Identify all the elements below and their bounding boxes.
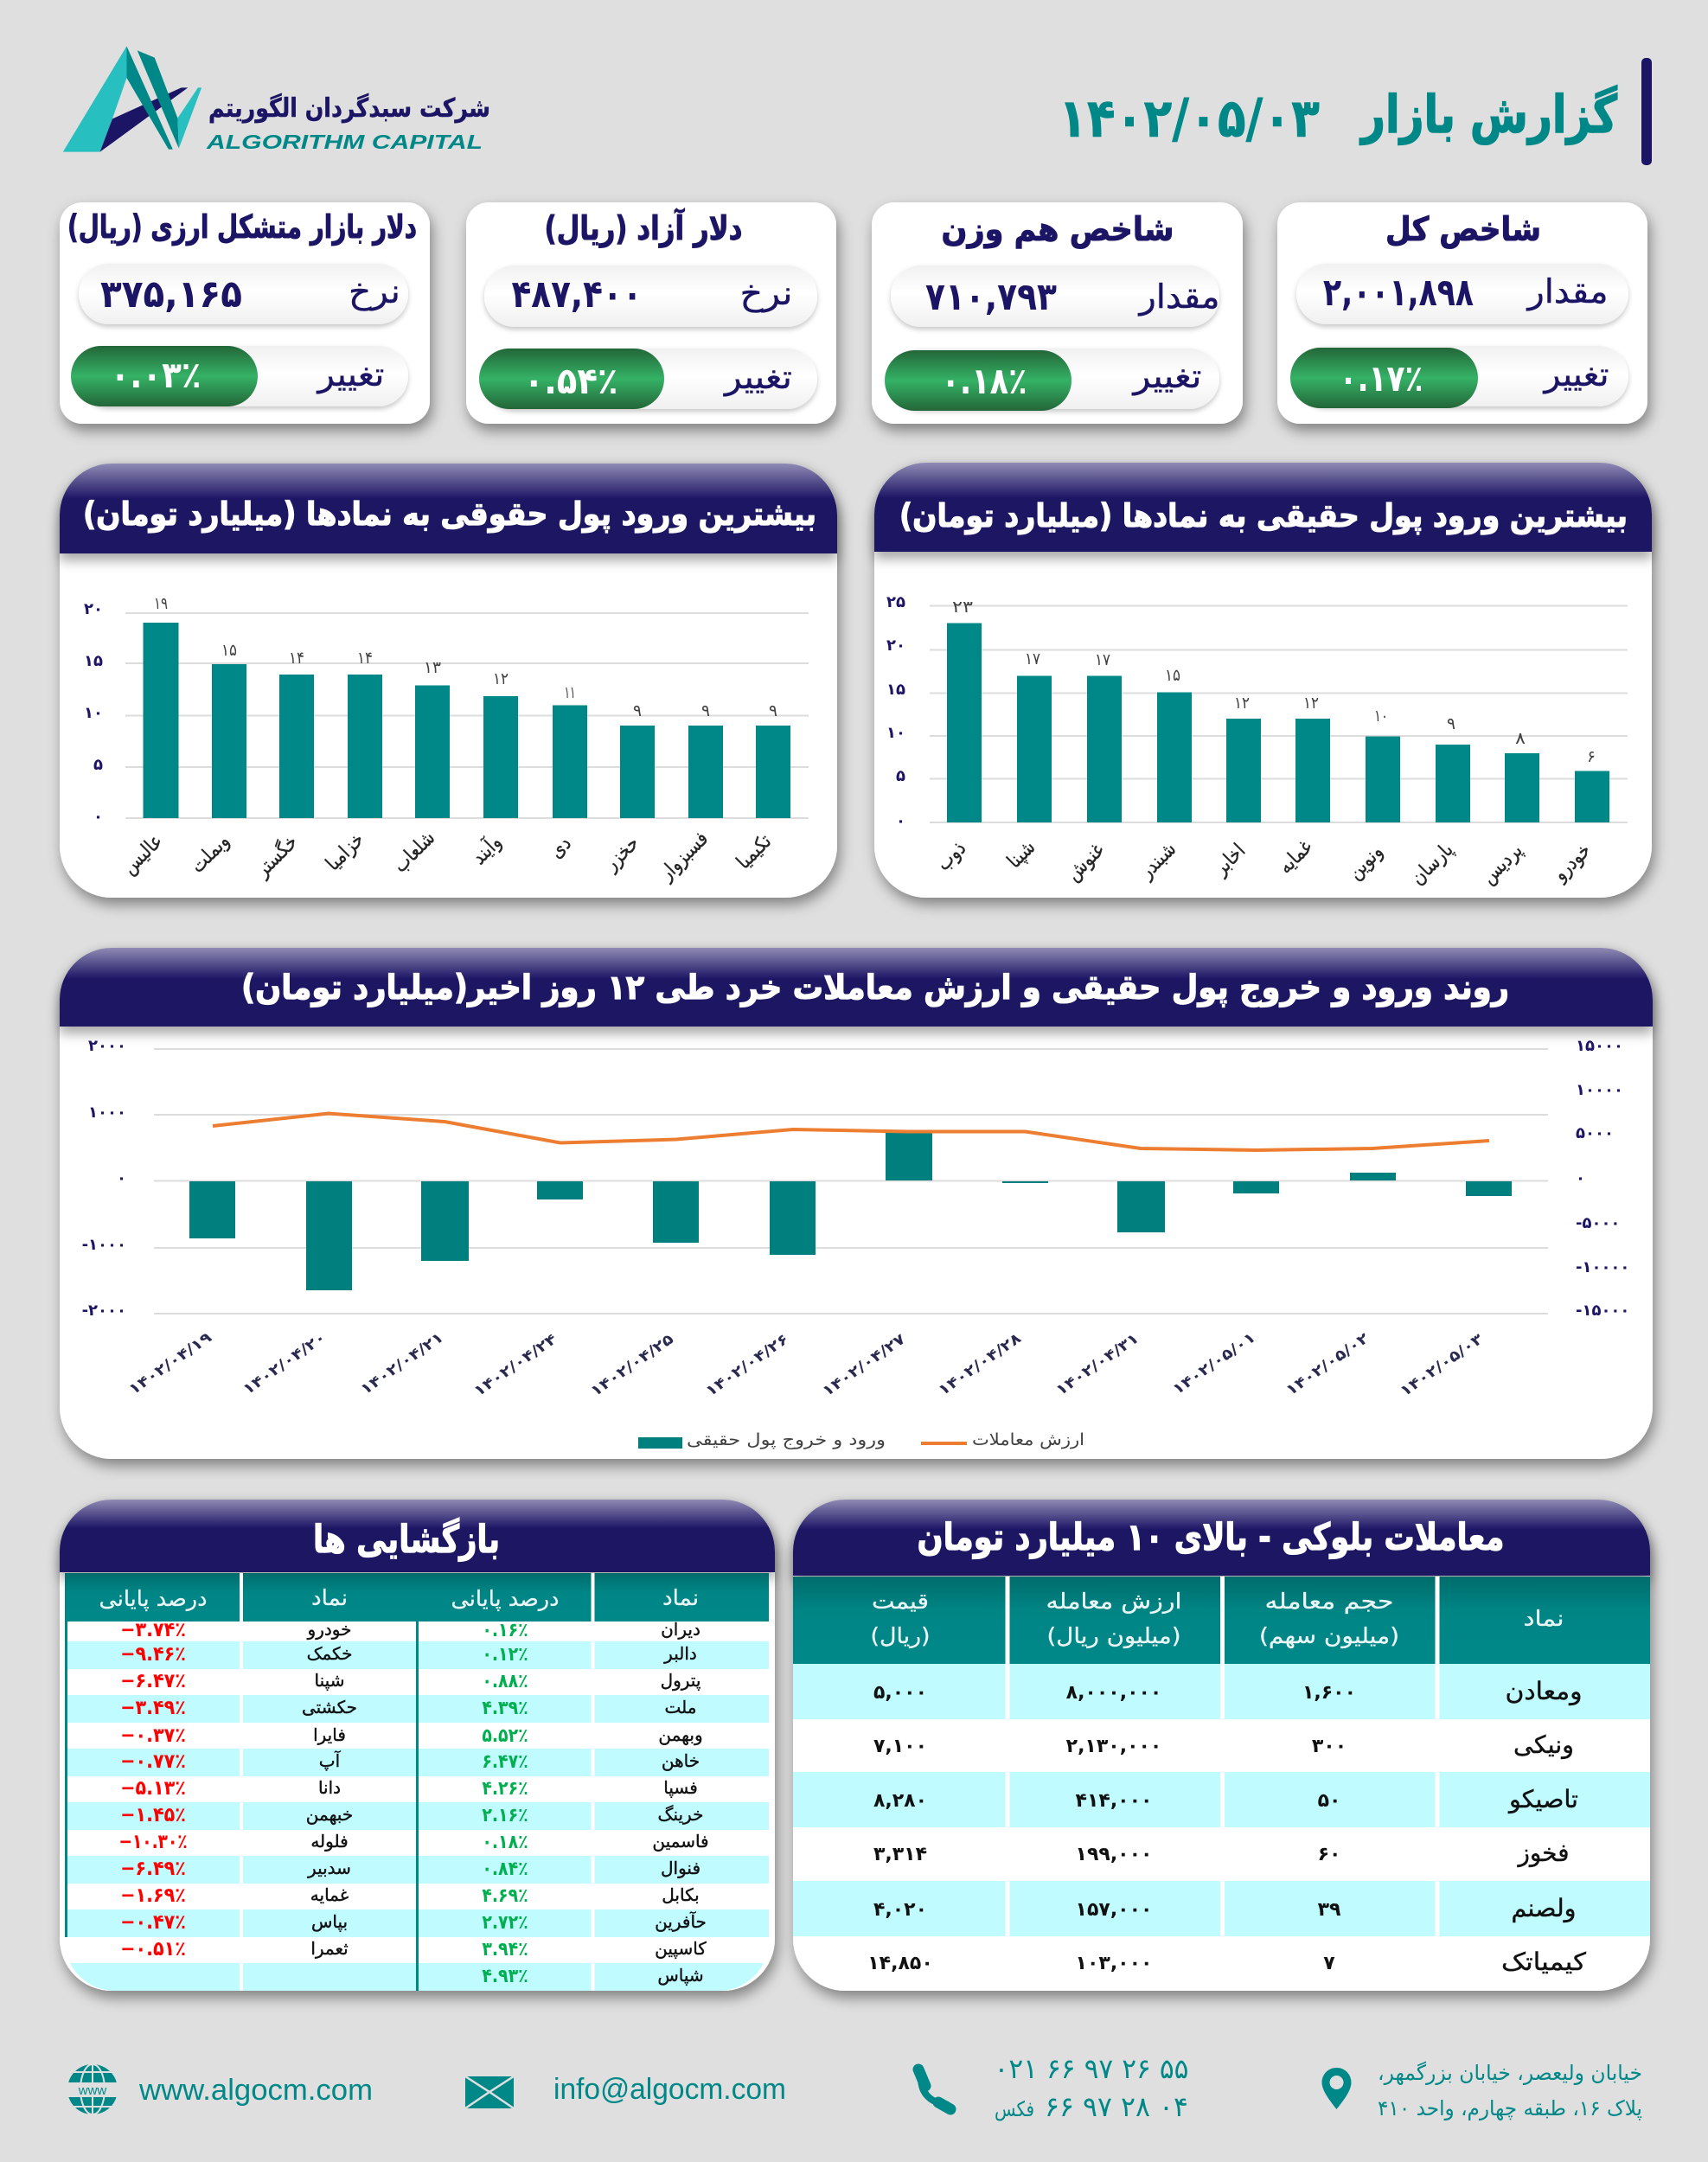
panel heading [60,1500,775,1572]
date labels [126,1328,1487,1400]
bar chart: real money inflow: ۲۰ [886,636,905,655]
right axis: ۱۵۰۰۰ [1576,1037,1623,1055]
table header [100,1588,697,1612]
bar chart: institutional money inflow: ۱۳ [424,658,441,677]
negative column percentages: −۹.۴۶٪ [120,1643,186,1666]
row: ونیکی: ۲,۱۳۰,۰۰۰ [1066,1736,1161,1757]
legend [638,1430,1084,1449]
row: ونیکی: ۷,۱۰۰ [873,1736,927,1757]
bar chart: real money inflow: ونوین [1344,841,1388,885]
value pill: نرخ [740,274,792,313]
icon: phone [918,2069,950,2109]
panel heading: بیشترین ورود پول حقوقی به نمادها (میلیارد تومان) [83,496,816,533]
bar chart: institutional money inflow: شلعاب [389,827,440,878]
bar chart: real money inflow: ۱۲ [1234,694,1250,713]
table header [870,1589,1564,1649]
bar chart: real money inflow: ۲۳ [952,598,973,617]
change pill [1290,346,1628,408]
bar chart: institutional money inflow: تکیمیا [732,829,777,874]
value pill: مقدار [1526,272,1609,310]
positive column percentages: ۲.۷۲٪ [482,1911,528,1933]
logo: Algorithm Capital [63,46,490,153]
address [1378,2061,1642,2120]
bar chart: institutional money inflow: حخزر [599,832,643,876]
negative column symbols: سدبیر [307,1858,351,1878]
positive column percentages: ۰.۱۶٪ [482,1619,528,1641]
bar chart: institutional money inflow: ۱۱ [564,683,576,702]
positive column percentages: ۶.۴۷٪ [482,1750,528,1772]
bar chart: real money inflow: ۶ [1587,747,1596,766]
negative column symbols [302,1619,357,1959]
negative column symbols: ثعمرا [310,1938,349,1959]
table: block trades [793,1577,1650,1991]
panel: top institutional money inflow [60,464,837,898]
positive column percentages: ۰.۱۸٪ [482,1831,528,1852]
bar chart: real money inflow: پردیس [1477,839,1527,889]
icon: envelope [465,2076,514,2108]
row: ولصنم: ۱۵۷,۰۰۰ [1076,1899,1152,1921]
negative column symbols: فلوله [310,1831,349,1852]
legend: ارزش معاملات [972,1430,1084,1449]
bar chart: real money inflow: پارسان [1406,838,1458,890]
negative column symbols: خکمک [307,1643,352,1664]
positive column symbols: بکابل [662,1884,700,1905]
value pill: مقدار [1137,278,1219,316]
positive column percentages: ۴.۹۳٪ [482,1965,528,1986]
table header: نماد [662,1585,699,1610]
row: ولصنم [873,1897,1574,1923]
negative column percentages: −۵.۱۳٪ [120,1777,186,1800]
bar chart: real money inflow: ۲۵ [886,593,905,611]
title: market report and date [1059,58,1652,165]
positive column percentages [482,1619,528,1986]
table header: (ریال) [870,1623,931,1648]
positive column percentages: ۵.۵۲٪ [482,1724,528,1746]
value pill [891,265,1219,327]
change pill: تغییر [1542,355,1609,394]
positive column symbols: وبهمن [658,1724,703,1745]
negative column percentages: −۳.۴۹٪ [120,1697,186,1719]
panel heading [60,948,1653,1027]
left axis: -۱۰۰۰ [82,1236,126,1254]
right axis: -۱۰۰۰۰ [1576,1258,1629,1276]
panel heading: بازگشایی ها [313,1517,500,1562]
positive column percentages: ۴.۳۹٪ [482,1697,528,1718]
change pill [479,349,817,409]
bar chart: real money inflow: خودرو [1548,839,1596,886]
table header: درصد پایانی [99,1586,208,1611]
positive column symbols: دیران [661,1619,700,1640]
bar chart: real money inflow: ۱۵ [1165,666,1180,685]
row: ونیکی [873,1734,1572,1759]
row: ولصنم: ۳۹ [1318,1899,1340,1921]
row: کیمیاتک: کیمیاتک [1501,1948,1587,1976]
date labels: ۱۴۰۲/۰۵/۰۳ [1398,1330,1487,1400]
row: ولصنم: ولصنم [1512,1894,1576,1922]
right axis: -۱۵۰۰۰ [1576,1302,1629,1320]
logo english name: ALGORITHM CAPITAL [206,131,483,153]
bar chart: real money inflow: ۵ [896,767,905,785]
negative column percentages [118,1619,188,1961]
date labels: ۱۴۰۲/۰۴/۲۶ [703,1331,792,1400]
positive column symbols: فاسمین [652,1831,709,1852]
change pill [71,346,408,406]
date labels: ۱۴۰۲/۰۵/۰۱ [1170,1329,1259,1398]
bar chart: institutional money inflow: ۹ [701,701,710,720]
title accent bar [1641,58,1652,165]
change pill: تغییر [1131,357,1202,396]
date labels: ۱۴۰۲/۰۴/۳۱ [1053,1330,1142,1399]
positive column percentages: ۳.۹۴٪ [482,1938,528,1960]
bar chart: real money inflow: غمایه [1274,835,1317,879]
positive column symbols: ملت [665,1697,696,1717]
website: www.algocm.com [138,2074,373,2107]
positive column percentages: ۰.۸۴٪ [482,1858,528,1879]
table header: قیمت [872,1589,929,1614]
legend: ورود و خروج پول حقیقی [687,1430,886,1449]
right axis: ۱۰۰۰۰ [1576,1081,1623,1099]
negative column percentages: −۶.۴۷٪ [120,1670,186,1692]
bar chart: real money inflow: ۱۰ [1374,707,1388,726]
bar chart: real money inflow: ذوب [932,837,970,875]
negative column percentages: −۰.۵۱٪ [120,1938,186,1961]
row: ونیکی: ۳۰۰ [1312,1736,1347,1757]
address: خیابان ولیعصر، خیابان بزرگمهر، [1378,2061,1642,2085]
card: equal weight index [872,202,1243,424]
title text: گزارش بازار [1359,85,1617,145]
negative column symbols: فایرا [313,1724,346,1745]
negative column symbols: حکشتی [302,1697,357,1717]
date labels: ۱۴۰۲/۰۴/۱۹ [126,1328,215,1398]
bar chart: institutional money inflow: ۱۹ [154,594,168,613]
row: کیمیاتک [870,1951,1586,1973]
bar chart: institutional money inflow: فسبزوار [655,828,713,886]
positive column symbols: فسپا [663,1777,698,1799]
change pill: ۰.۵۴٪ [524,360,617,402]
panel heading: بیشترین ورود پول حقیقی به نمادها (میلیارد تومان) [899,497,1628,534]
negative column percentages: −۱.۶۹٪ [120,1884,186,1907]
table header: درصد پایانی [451,1586,559,1611]
left axis [82,1037,126,1320]
panel: top real money inflow [874,463,1652,898]
bar chart: institutional money inflow: ۵ [93,756,103,774]
bar chart: real money inflow: ۰ [896,812,905,830]
change pill: تغییر [316,355,384,394]
logo mark [63,46,202,152]
table header: حجم معامله [1264,1589,1394,1615]
date labels: ۱۴۰۲/۰۴/۲۴ [471,1331,560,1400]
bar chart: real money inflow: اخابر [1209,839,1251,880]
card title: شاخص هم وزن [941,210,1174,249]
panel: block trades table [793,1500,1650,1991]
row: تاصیکو: ۴۱۴,۰۰۰ [1076,1790,1152,1812]
bar chart: institutional money inflow: ۹ [769,701,777,720]
value pill [79,264,408,324]
value pill: ۳۷۵,۱۶۵ [100,272,242,317]
bar chart: institutional money inflow [84,594,809,886]
footer: contact details [66,2052,1642,2123]
negative column symbols: شپنا [315,1670,344,1692]
panel heading: معاملات بلوکی - بالای ۱۰ میلیارد تومان [917,1516,1505,1559]
bar chart: real money inflow: ۱۵ [886,681,905,699]
row: فخوز: ۱۹۹,۰۰۰ [1076,1844,1152,1865]
positive column symbols: پترول [661,1670,700,1692]
card title: دلار آزاد (ریال) [545,208,742,247]
bar chart: real money inflow: ۱۰ [886,724,905,742]
bar chart: institutional money inflow: ۰ [93,808,103,826]
bar chart: institutional money inflow: وآیند [466,829,506,869]
bar chart: institutional money inflow: ۲۰ [84,600,103,618]
bar chart: real money inflow: ۱۷ [1095,650,1110,669]
bar chart: real money inflow: ۱۲ [1303,694,1319,713]
bar chart: institutional money inflow: عالیس [118,829,168,880]
bar chart: institutional money inflow: ۱۵ [221,641,237,660]
date labels: ۱۴۰۲/۰۴/۲۵ [588,1331,677,1400]
negative column percentages: −۰.۳۷٪ [120,1724,186,1747]
card: free dollar [466,202,836,424]
date labels: ۱۴۰۲/۰۴/۲۷ [820,1330,909,1400]
table header: (میلیون سهم) [1259,1623,1399,1649]
change pill [885,349,1219,411]
row: ومعادن: ۸,۰۰۰,۰۰۰ [1066,1682,1161,1704]
panel heading [793,1500,1650,1576]
row: ومعادن [873,1680,1581,1705]
change pill: ۰.۱۷٪ [1339,357,1423,400]
change pill: ۰.۰۳٪ [111,354,201,396]
positive column symbols: فنوال [661,1858,700,1878]
panel: opening symbols table [60,1500,775,1991]
positive column symbols: کاسپین [655,1938,707,1960]
row: ومعادن: ومعادن [1505,1677,1583,1705]
card title: دلار بازار متشکل ارزی (ریال) [67,208,417,246]
row: فخوز: فخوز [1517,1839,1569,1867]
value pill: ۴۸۷,۴۰۰ [512,272,642,317]
bar chart: institutional money inflow: وبملت [186,829,234,878]
row: فخوز: ۳,۳۱۴ [873,1844,927,1865]
negative column symbols: دانا [318,1777,341,1798]
fax number: ۶۶ ۹۷ ۲۸ ۰۴ [1045,2090,1188,2123]
bar chart: institutional money inflow: دی [545,832,576,863]
positive column symbols [652,1619,709,1986]
positive column symbols: حآفرین [655,1910,707,1932]
bar chart: real money inflow: ۸ [1515,729,1526,748]
negative column symbols: غمایه [310,1884,349,1905]
row: تاصیکو: تاصیکو [1507,1785,1578,1813]
positive column symbols: خاهن [662,1750,700,1771]
row: ومعادن: ۱,۶۰۰ [1302,1682,1356,1704]
negative column symbols: بپاس [311,1911,348,1933]
combo chart: bars and line [82,1037,1629,1449]
positive column symbols: شپاس [657,1965,704,1986]
negative column percentages: −۱۰.۳۰٪ [118,1831,188,1853]
value pill [484,265,817,327]
bar chart: real money inflow: ۹ [1447,714,1455,733]
negative column percentages: −۰.۴۷٪ [120,1911,186,1934]
left axis: -۲۰۰۰ [82,1302,126,1320]
left axis: ۰ [117,1169,126,1187]
bar chart: real money inflow: ۱۷ [1025,649,1040,668]
row: کیمیاتک: ۱۰۳,۰۰۰ [1076,1953,1152,1974]
panel heading: روند ورود و خروج پول حقیقی و ارزش معاملات خرد طی ۱۲ روز اخیر(میلیارد تومان) [241,969,1509,1007]
card title: شاخص کل [1385,210,1541,248]
bar chart: institutional money inflow: ۱۵ [84,652,103,670]
table: opening percentages [65,1573,769,1991]
table header: نماد [311,1585,348,1610]
email: info@algocm.com [553,2073,786,2106]
negative column percentages: −۶.۴۹٪ [120,1858,186,1880]
negative column percentages: −۱.۴۵٪ [120,1804,186,1826]
right axis: ۵۰۰۰ [1576,1124,1614,1142]
report date: ۱۴۰۲/۰۵/۰۳ [1059,86,1320,150]
row: کیمیاتک: ۷ [1323,1953,1335,1974]
icon: globe: www [78,2083,106,2098]
left axis: ۲۰۰۰ [88,1037,126,1055]
change pill: تغییر [723,358,792,397]
row: تاصیکو [873,1788,1577,1814]
bar chart: real money inflow [886,593,1628,890]
date labels: ۱۴۰۲/۰۵/۰۲ [1283,1329,1372,1399]
date labels: ۱۴۰۲/۰۴/۲۰ [240,1329,329,1398]
bar chart: real money inflow: شپنا [1002,835,1040,873]
table header: نماد [1524,1606,1564,1631]
value pill: ۲,۰۰۱,۸۹۸ [1323,271,1474,315]
positive column percentages: ۴.۲۶٪ [482,1777,528,1799]
icon: location pin [1321,2068,1351,2109]
card: organized market dollar [60,202,430,424]
phone number: ۰۲۱ ۶۶ ۹۷ ۲۶ ۵۵ [995,2052,1188,2085]
bar chart: institutional money inflow: خزامیا [322,828,368,875]
negative column symbols: خبهمن [306,1804,353,1825]
right axis: ۰ [1576,1169,1585,1187]
negative column percentages: −۳.۷۴٪ [120,1619,186,1641]
bar chart: institutional money inflow: ۱۲ [493,669,509,688]
right axis: -۵۰۰۰ [1576,1214,1620,1232]
left axis: ۱۰۰۰ [88,1103,126,1122]
panel: 12 day trend of real money flow and trade value [60,948,1653,1459]
row: فخوز [873,1845,1568,1868]
address: پلاک ۱۶، طبقه چهارم، واحد ۴۱۰ [1378,2096,1642,2120]
bar chart: institutional money inflow: ۱۴ [289,649,304,668]
bar chart: real money inflow: غنوش [1062,839,1109,886]
table header: (میلیون ریال) [1046,1623,1181,1648]
positive column percentages: ۰.۱۲٪ [482,1643,528,1665]
positive column symbols: خرینگ [658,1804,703,1825]
bar chart: institutional money inflow: ۱۰ [84,704,103,722]
value pill: نرخ [349,272,400,311]
change pill: ۰.۱۸٪ [941,360,1027,402]
value pill [1296,264,1628,324]
bar chart: institutional money inflow: ۹ [633,701,642,720]
positive column percentages: ۴.۶۹٪ [482,1884,528,1906]
row: ومعادن: ۵,۰۰۰ [873,1682,927,1704]
right axis [1576,1037,1629,1320]
panel heading [60,464,837,553]
positive column percentages: ۲.۱۶٪ [482,1804,528,1826]
row: ولصنم: ۴,۰۲۰ [873,1899,927,1921]
positive column percentages: ۰.۸۸٪ [482,1670,528,1692]
row: کیمیاتک: ۱۴,۸۵۰ [867,1953,933,1974]
date labels: ۱۴۰۲/۰۴/۲۱ [358,1329,447,1398]
row: تاصیکو: ۵۰ [1318,1790,1340,1812]
bar chart: institutional money inflow: خگستر [250,830,303,882]
bar chart: real money inflow: شبندر [1135,838,1180,884]
negative column symbols: خودرو [307,1619,351,1640]
bar chart: institutional money inflow: ۱۴ [357,649,373,668]
negative column symbols: آپ [319,1749,342,1771]
panel heading [874,463,1652,552]
icon: globe [66,2064,119,2114]
value pill: ۷۱۰,۷۹۳ [925,275,1057,319]
date labels: ۱۴۰۲/۰۴/۲۸ [936,1329,1025,1399]
positive column symbols: دالبر [663,1643,697,1664]
table header: ارزش معامله [1046,1589,1181,1614]
logo persian name: شرکت سبدگردان الگوریتم [208,93,490,124]
row: تاصیکو: ۸,۲۸۰ [873,1790,927,1812]
row: ونیکی: ونیکی [1513,1730,1574,1759]
row: فخوز: ۶۰ [1318,1844,1340,1865]
negative column percentages: −۰.۷۷٪ [120,1750,186,1773]
fax number: فکس [995,2097,1034,2121]
card: overall index [1277,202,1647,424]
